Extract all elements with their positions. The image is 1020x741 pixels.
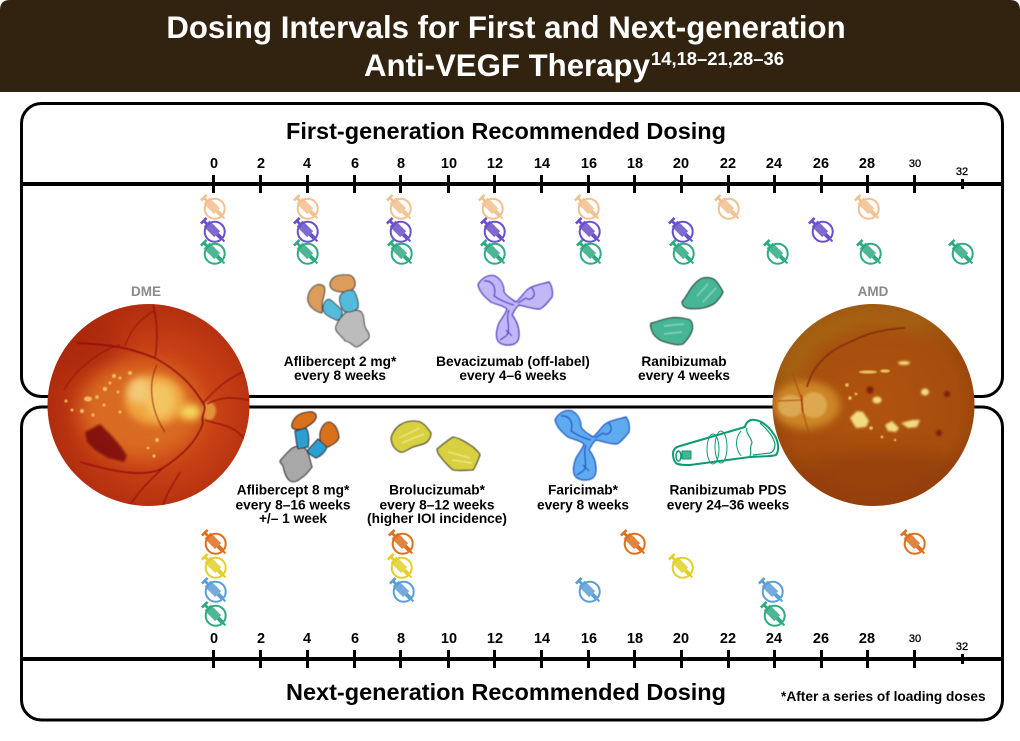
panel: next-generation dosing [22, 407, 1002, 720]
label: aflibercept 8 mg: +/– 1 week [259, 511, 327, 526]
bottom week labels: 8 [397, 631, 405, 647]
top week labels: 16 [581, 156, 597, 172]
bottom week labels: 20 [673, 631, 689, 647]
label: aflibercept 2 mg: Aflibercept 2 mg* [284, 354, 397, 369]
top week labels: 10 [441, 156, 457, 172]
bottom week labels: 18 [627, 631, 643, 647]
top week labels: 6 [351, 156, 359, 172]
title: Dosing Intervals for First and Next-generation [166, 10, 846, 45]
molecule: ranibizumab fragments [651, 278, 723, 345]
injection row: bevacizumab (purple) [200, 217, 835, 244]
label: brolucizumab [367, 482, 507, 526]
molecule: aflibercept 8 mg [280, 412, 339, 482]
label: ranibizumab PDS [667, 482, 790, 512]
label: bevacizumab: every 4–6 weeks [459, 368, 567, 383]
top week labels: 8 [397, 156, 405, 172]
bottom week labels: 6 [351, 631, 359, 647]
top week labels: 2 [257, 156, 265, 172]
bottom week labels: 32 [956, 641, 968, 653]
label: ranibizumab: Ranibizumab [641, 354, 727, 369]
top week labels: 26 [813, 156, 829, 172]
bottom week labels: 10 [441, 631, 457, 647]
bottom week labels: 12 [487, 631, 503, 647]
label: bevacizumab: Bevacizumab (off-label) [436, 354, 590, 369]
bottom week labels: 16 [581, 631, 597, 647]
top week labels: 18 [627, 156, 643, 172]
bottom timeline axis [21, 650, 1003, 668]
molecule: aflibercept 2 mg [308, 275, 369, 347]
injection row: aflibercept 2 mg (peach) [200, 194, 881, 221]
label: aflibercept 2 mg: every 8 weeks [294, 368, 386, 383]
label: ranibizumab: every 4 weeks [638, 368, 730, 383]
top week labels: 0 [210, 156, 218, 172]
label: aflibercept 8 mg [236, 482, 351, 526]
title: 14,18–21,28–36 [651, 48, 784, 69]
label: brolucizumab: Brolucizumab* [389, 482, 486, 498]
injection row: aflibercept 8 mg (orange) [201, 529, 927, 556]
label: faricimab: Faricimab* [548, 482, 619, 498]
top week labels: 30 [909, 158, 921, 170]
label: brolucizumab: (higher IOI incidence) [367, 511, 507, 526]
injection row: brolucizumab (yellow) [201, 553, 695, 580]
bottom week labels: 2 [257, 631, 265, 647]
top week labels: 32 [956, 166, 968, 178]
top week labels [210, 156, 968, 178]
bottom week labels: 0 [210, 631, 218, 647]
bottom week labels: 4 [303, 631, 311, 647]
top week labels: 12 [487, 156, 503, 172]
bottom week labels: 14 [534, 631, 550, 647]
heading: next-generation: Next-generation Recommended Dosing [286, 679, 726, 705]
label: aflibercept 8 mg: Aflibercept 8 mg* [237, 482, 350, 498]
molecule: faricimab antibody [555, 410, 629, 480]
bottom week labels: 24 [766, 631, 782, 647]
top week labels: 20 [673, 156, 689, 172]
bottom week labels [210, 631, 968, 653]
top timeline axis [21, 175, 1003, 193]
bottom week labels: 22 [720, 631, 736, 647]
top week labels: 24 [766, 156, 782, 172]
bottom week labels: 30 [909, 633, 921, 645]
top week labels: 28 [859, 156, 875, 172]
label: aflibercept 2 mg [284, 354, 397, 383]
bottom week labels: 26 [813, 631, 829, 647]
label: faricimab [537, 482, 629, 512]
molecule: bevacizumab antibody [478, 275, 552, 345]
implant: ranibizumab PDS [673, 420, 778, 465]
title [166, 10, 846, 83]
header band [0, 0, 1020, 92]
title: Anti-VEGF Therapy [364, 48, 651, 83]
top week labels: 22 [720, 156, 736, 172]
label: ranibizumab PDS: every 24–36 weeks [667, 498, 790, 512]
label: ranibizumab [638, 354, 730, 383]
panel: first-generation dosing [22, 104, 1002, 396]
label: DME: DME [131, 284, 161, 299]
label: aflibercept 8 mg: every 8–16 weeks [236, 498, 351, 512]
retina image: AMD [772, 304, 974, 506]
top week labels: 4 [303, 156, 311, 172]
top week labels: 14 [534, 156, 550, 172]
bottom week labels: 28 [859, 631, 875, 647]
label: brolucizumab: every 8–12 weeks [380, 498, 495, 512]
label: AMD: AMD [858, 284, 889, 299]
footnote: *After a series of loading doses [781, 689, 986, 704]
retina image: DME [47, 304, 250, 510]
molecule: brolucizumab fragments [391, 421, 480, 470]
injection row: faricimab (blue) [201, 577, 785, 604]
injection row: ranibizumab PDS (green) [201, 601, 787, 628]
injection row: ranibizumab (green) [200, 239, 975, 266]
label: bevacizumab [436, 354, 590, 383]
heading: first-generation: First-generation Recommended Dosing [286, 118, 726, 144]
label: faricimab: every 8 weeks [537, 498, 629, 512]
label: ranibizumab PDS: Ranibizumab PDS [669, 482, 787, 498]
